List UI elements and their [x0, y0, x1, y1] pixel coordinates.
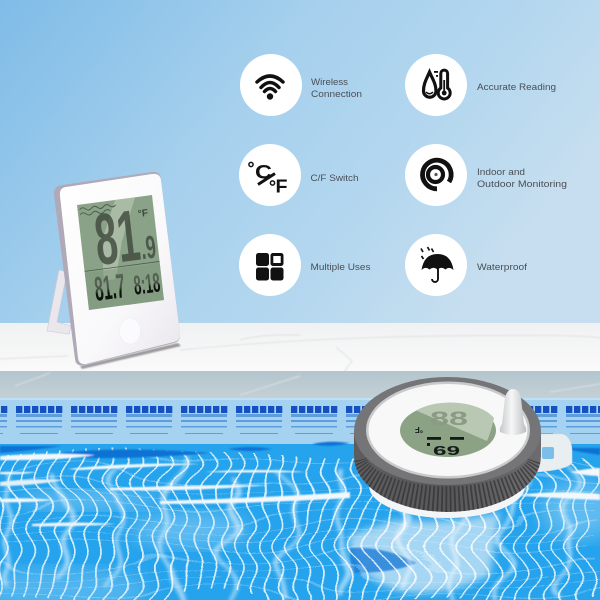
- ribbed skirt: [350, 431, 545, 513]
- float reflection: [350, 512, 500, 593]
- feature: waterproof: Waterproof: [477, 262, 527, 273]
- feature: wireless connection: Connection: [311, 89, 362, 100]
- feature: multiple uses: Multiple Uses: [310, 262, 371, 273]
- pool tile band: [0, 398, 600, 450]
- casing front: [60, 174, 180, 364]
- feature: indoor and outdoor monitoring: Indoor and: [477, 167, 525, 178]
- lcd screen: [77, 193, 164, 310]
- feature: C/F switch: [239, 144, 358, 206]
- float lcd: °F: [415, 425, 423, 434]
- float lcd: [400, 403, 496, 458]
- feature: waterproof: [405, 234, 527, 296]
- pool wall: [0, 371, 600, 398]
- float lcd: 69: [433, 443, 460, 458]
- lcd screen: 81.7: [93, 267, 127, 309]
- indoor display unit: [47, 172, 181, 369]
- feature: multiple uses: [239, 234, 371, 296]
- handle: [532, 434, 572, 472]
- feature: wireless connection: Wireless: [311, 77, 348, 88]
- feature: C/F switch: C/F Switch: [310, 173, 358, 184]
- feature: indoor and outdoor monitoring: [405, 144, 567, 206]
- feature: C/F switch: C: [255, 162, 272, 184]
- icon group: feature list: [239, 54, 567, 296]
- top ring: [354, 377, 541, 485]
- casing edge: [54, 172, 180, 365]
- feature: wireless connection: [240, 54, 362, 116]
- kickstand: [47, 270, 71, 334]
- lcd screen: °F: [137, 208, 149, 220]
- shadow on marble: [80, 343, 181, 369]
- feature: accurate reading: [405, 54, 556, 116]
- pool float sensor: [350, 377, 572, 518]
- lcd screen: 81: [91, 195, 144, 281]
- feature: indoor and outdoor monitoring: Outdoor Monitoring: [477, 179, 567, 190]
- feature: C/F switch: F: [276, 176, 288, 196]
- clear lens ring: [366, 382, 530, 478]
- lcd screen: 8:18: [132, 266, 162, 301]
- pool water: [0, 442, 600, 600]
- white face: [368, 384, 528, 476]
- lcd screen: .9: [139, 229, 158, 266]
- antenna: [500, 389, 526, 435]
- sky background: [0, 0, 600, 324]
- underside: [369, 454, 525, 518]
- float lcd: 88: [430, 409, 468, 430]
- marble ledge: [0, 323, 600, 372]
- button: [120, 318, 140, 344]
- feature: accurate reading: Accurate Reading: [477, 82, 556, 93]
